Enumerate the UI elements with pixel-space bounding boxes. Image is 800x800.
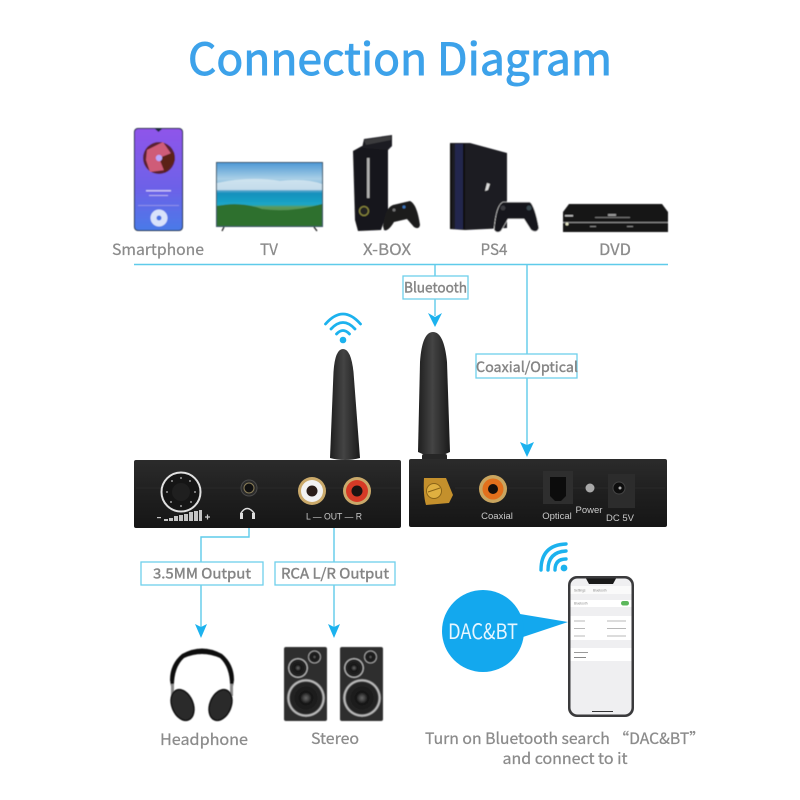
RCA R jack bbox=[343, 477, 371, 505]
label: Smartphone: Smartphone bbox=[112, 238, 204, 260]
icon: smartphone bbox=[134, 128, 183, 231]
panel: left device front bbox=[134, 460, 401, 528]
label: PS4: PS4 bbox=[480, 238, 508, 260]
right speaker bbox=[340, 647, 383, 721]
tag: 3.5MM Output bbox=[141, 562, 263, 585]
icon: phone with Bluetooth settings: Bluetooth bbox=[574, 602, 588, 606]
text: Bluetooth instruction: Turn on Bluetooth search “DAC&BT” bbox=[425, 727, 705, 749]
RCA L jack bbox=[298, 477, 326, 505]
headphone jack bbox=[241, 480, 257, 496]
tag: Coaxial/Optical: Coaxial/Optical bbox=[476, 357, 578, 377]
label: Coaxial: Coaxial bbox=[481, 511, 513, 522]
label: TV: TV bbox=[260, 238, 278, 260]
tag: 3.5MM Output: 3.5MM Output bbox=[153, 564, 252, 584]
icon: TV bbox=[216, 162, 323, 231]
label: X-BOX: X-BOX bbox=[363, 238, 411, 260]
icon: headphone glyph bbox=[240, 508, 255, 519]
connector: source bus line bbox=[134, 264, 668, 266]
DC jack bbox=[608, 474, 635, 508]
right antenna bbox=[418, 332, 450, 478]
icon: stereo speakers bbox=[284, 647, 383, 721]
gold antenna connector bbox=[424, 478, 453, 505]
icon: X-BOX console with controller bbox=[353, 135, 420, 231]
icon: headphones bbox=[167, 648, 236, 724]
left speaker bbox=[284, 647, 327, 721]
connector: 3.5MM output arrow bbox=[195, 528, 249, 638]
volume knob bbox=[162, 472, 200, 512]
icon: DVD player bbox=[563, 204, 668, 232]
icon: phone with Bluetooth settings: Settings bbox=[574, 588, 586, 592]
label: DVD: DVD bbox=[599, 238, 631, 260]
label: Stereo: Stereo bbox=[311, 727, 359, 749]
callout: DAC&BT bubble: DAC&BT bbox=[448, 616, 518, 646]
coaxial jack bbox=[479, 475, 507, 503]
connector: Coaxial/Optical arrow bbox=[520, 264, 534, 457]
callout: DAC&BT bubble bbox=[442, 590, 568, 672]
label: DC 5V: DC 5V bbox=[606, 513, 635, 524]
title: Connection Diagram bbox=[188, 24, 612, 88]
icon: phone with Bluetooth settings bbox=[568, 576, 634, 717]
text: Bluetooth instruction: and connect to it bbox=[502, 747, 628, 769]
connector: RCA output arrow bbox=[328, 528, 340, 638]
optical port bbox=[543, 471, 573, 504]
label: Optical: Optical bbox=[542, 511, 572, 522]
power LED bbox=[586, 484, 594, 492]
label: Headphone: Headphone bbox=[160, 728, 248, 750]
text: Bluetooth instruction bbox=[425, 727, 705, 769]
label: L OUT R: L — OUT — R bbox=[306, 512, 362, 522]
volume scale bbox=[157, 510, 210, 521]
tag: Bluetooth: Bluetooth bbox=[404, 278, 467, 298]
panel: right device rear bbox=[409, 459, 667, 527]
icon: PS4 console with controller bbox=[450, 143, 539, 232]
connector: Bluetooth arrow bbox=[428, 264, 442, 327]
label: Power: Power bbox=[576, 505, 602, 516]
icon: wifi beside phone bbox=[541, 544, 567, 571]
icon: phone with Bluetooth settings: Bluetooth bbox=[593, 588, 607, 592]
tag: RCA L/R Output: RCA L/R Output bbox=[281, 564, 390, 584]
left antenna bbox=[330, 349, 360, 460]
icon: wifi above left antenna bbox=[326, 314, 360, 343]
